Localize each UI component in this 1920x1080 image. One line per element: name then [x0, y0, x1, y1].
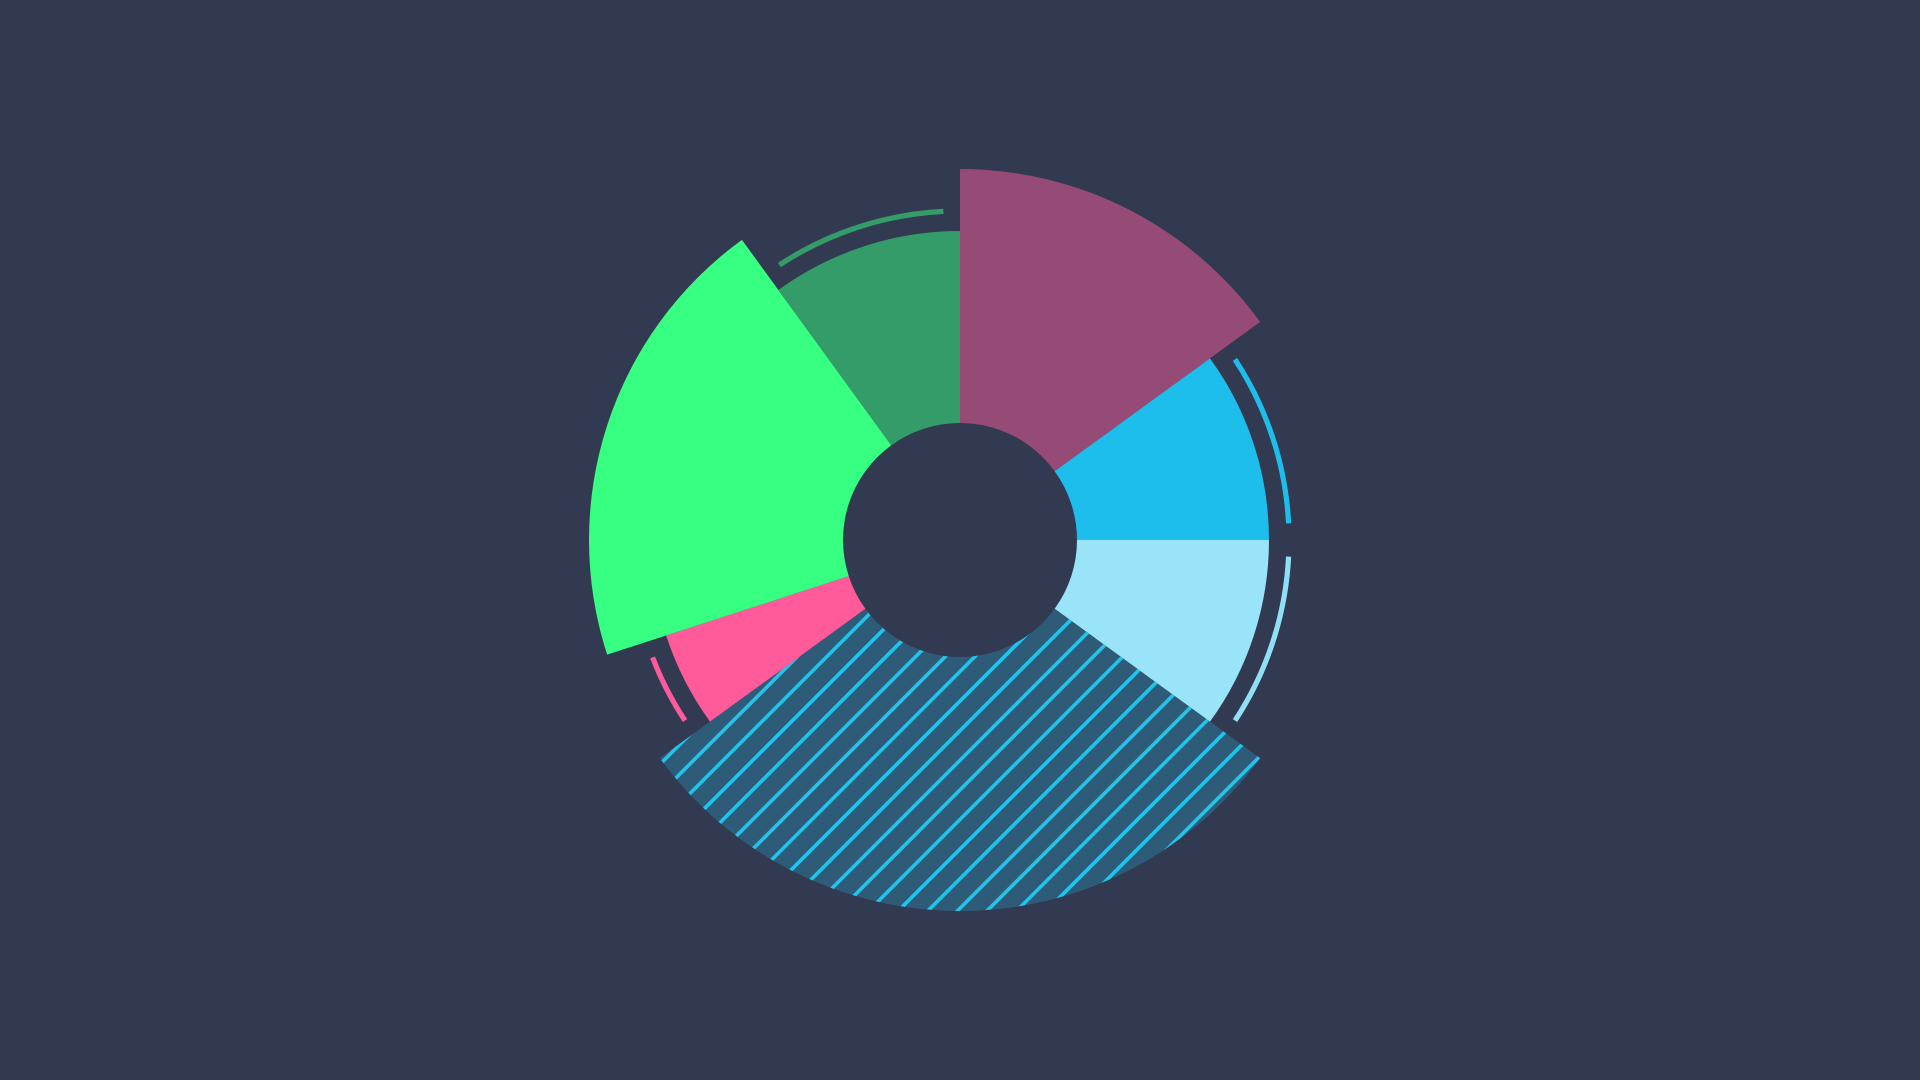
sector: bright green	[589, 240, 891, 655]
sector: hatched forecast	[660, 608, 1260, 911]
radial sector chart	[589, 169, 1292, 911]
outer arc: light blue	[1235, 557, 1289, 721]
sector: plum	[960, 169, 1260, 471]
outer arc: dark green	[779, 211, 943, 265]
sector: light blue	[1055, 540, 1269, 722]
sector: pink	[666, 576, 865, 722]
sector: dark green	[778, 231, 960, 445]
outer arc: cyan	[1235, 359, 1289, 523]
outer arc: pink	[653, 657, 685, 721]
sector: cyan	[1055, 358, 1269, 540]
